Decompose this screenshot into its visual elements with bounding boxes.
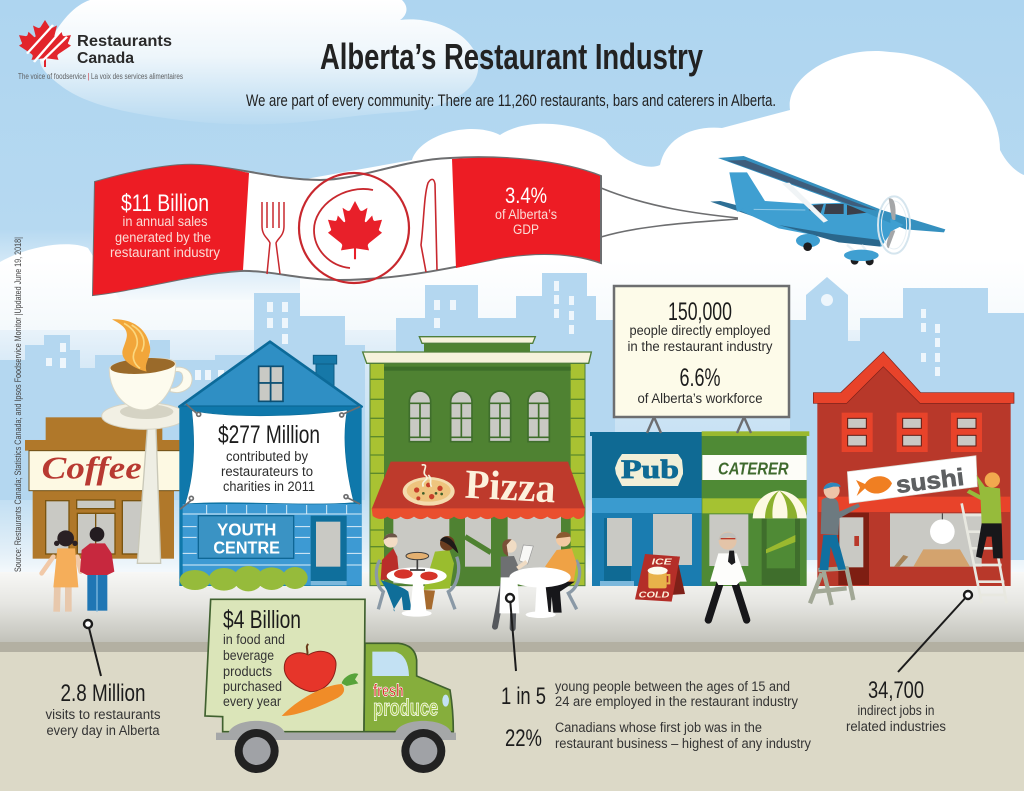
fresh produce lettering	[373, 681, 438, 720]
city skyline	[0, 273, 1024, 560]
icon: plate	[299, 173, 409, 283]
truck box	[205, 599, 365, 732]
charity text: $277 Million	[218, 421, 320, 449]
pub sign: Pub	[621, 455, 679, 484]
banner towed by plane	[93, 157, 601, 295]
stat: first job: 22%	[505, 725, 542, 752]
caterer sign: CATERER	[718, 458, 789, 478]
pizza restaurant	[363, 337, 591, 628]
icon: apple	[284, 644, 336, 692]
logo maple leaf	[19, 20, 71, 67]
brick facade	[183, 504, 362, 585]
logo wordmark: Restaurants	[77, 33, 172, 50]
airplane	[710, 156, 945, 265]
road band and ground	[0, 642, 1024, 791]
cab window	[372, 652, 409, 676]
sushi sign: sushi	[894, 464, 966, 499]
banner text: sales: generated by the	[115, 230, 211, 245]
banner hooks	[180, 404, 360, 509]
stat: visits: 2.8 Million	[60, 680, 146, 707]
banner left red panel	[93, 165, 249, 295]
employment billboard: of Alberta’s workforce	[638, 391, 762, 406]
truck text: products	[223, 664, 272, 679]
banner text: sales: $11 Billion	[121, 190, 209, 217]
stat: indirect jobs: 34,700	[868, 677, 924, 704]
icon: fork	[262, 202, 284, 274]
banner text: sales: in annual sales	[122, 214, 208, 229]
truck text: in food and	[223, 632, 285, 647]
door	[311, 516, 347, 585]
worker on ladder	[962, 472, 1007, 603]
pizza awning	[372, 461, 585, 519]
attic window	[259, 366, 283, 401]
coffee sign	[29, 449, 180, 491]
banner text: GDP: of Alberta’s	[495, 207, 557, 222]
coffee shop	[25, 319, 192, 563]
logo wordmark: Canada	[77, 50, 134, 67]
pub and caterer sign posts	[647, 417, 751, 433]
stat: indirect jobs	[846, 677, 946, 734]
stat: young people: young people between the ages of 15 and	[555, 679, 790, 694]
banner text: GDP	[495, 183, 557, 237]
logo wordmark	[77, 33, 172, 67]
employment billboard: people directly employed	[630, 323, 770, 338]
icon: knife	[421, 179, 437, 272]
caterer umbrella	[753, 491, 807, 518]
stat: young people: 1 in 5	[501, 683, 546, 710]
truck cab	[364, 643, 453, 732]
tow ropes	[601, 188, 738, 237]
charity text: charities in 2011	[223, 479, 315, 494]
caterer sign	[702, 455, 807, 480]
caterer passerby	[708, 532, 747, 620]
stat: young people	[501, 679, 798, 710]
sushi walls and roof	[813, 352, 1014, 586]
icon: fish	[856, 476, 892, 496]
stat: indirect jobs: related industries	[846, 719, 946, 734]
walls and roof	[179, 342, 362, 407]
employment billboard	[614, 286, 789, 417]
right table diner	[509, 532, 580, 618]
charity banner	[185, 410, 354, 504]
truck text: every year	[223, 694, 281, 709]
people walking: girl and man	[42, 527, 114, 612]
icon: carrot	[282, 673, 358, 716]
ice cold sign: ICE	[652, 557, 672, 567]
coffee cup sign on pole	[102, 356, 192, 563]
sushi sign	[847, 456, 977, 503]
sushi window	[890, 513, 982, 567]
ice cold sign	[635, 554, 685, 602]
stat: young people: 24 are employed in the restaurant industry	[555, 694, 798, 709]
youth centre sign: CENTRE	[213, 537, 280, 557]
waitress	[495, 539, 533, 628]
bushes	[180, 566, 308, 591]
charity text	[218, 421, 320, 494]
stat: first job: restaurant business – highest of any industry	[555, 736, 811, 751]
sushi upper windows	[842, 413, 982, 452]
stat: visits	[46, 680, 161, 738]
coffee sign: Coffee	[42, 449, 142, 485]
pub building	[590, 432, 703, 586]
wheels	[235, 729, 445, 773]
banner text: sales	[110, 190, 220, 260]
source note: Source: Restaurants Canada; Statistics Canada; and Ipsos Foodservice Monitor |Updated June 19, 2018|	[13, 237, 24, 572]
coffee shop walls	[25, 417, 180, 559]
pizza lettering: Pizza	[464, 461, 557, 511]
upper windows	[409, 391, 549, 442]
pub sign	[615, 454, 683, 486]
callout pin: indirect jobs	[898, 591, 972, 672]
ice cold sign: COLD	[639, 589, 669, 599]
pizza building	[363, 337, 591, 586]
logo tagline: The voice of foodservice | La voix des services alimentaires	[18, 72, 183, 81]
logo: Restaurants Canada	[18, 20, 183, 81]
callout pin: young people	[506, 594, 516, 671]
truck text: beverage	[223, 648, 274, 663]
sushi door	[838, 513, 869, 585]
chimney	[313, 355, 337, 387]
callout pin: visits	[84, 620, 101, 676]
coffee shop windows	[46, 500, 146, 554]
sushi restaurant	[810, 352, 1014, 605]
stat: first job: Canadians whose first job was in the	[555, 720, 762, 735]
worker on stepladder	[810, 483, 860, 605]
youth centre building	[179, 342, 362, 591]
stat: first job	[505, 720, 811, 752]
fresh produce lettering: fresh	[373, 681, 404, 701]
banner right red panel	[452, 158, 600, 268]
employment billboard: in the restaurant industry	[628, 339, 773, 354]
banner text: GDP: 3.4%	[505, 183, 547, 208]
stat: indirect jobs: indirect jobs in	[858, 703, 934, 718]
truck text: $4 Billion	[223, 606, 301, 634]
youth centre sign: YOUTH	[217, 519, 276, 539]
sidewalk	[0, 572, 1024, 642]
truck text	[223, 606, 301, 709]
icon: canadian maple leaf	[328, 201, 382, 259]
clouds	[0, 0, 1024, 330]
banner text: GDP: GDP	[513, 222, 539, 237]
caterer building	[702, 431, 809, 586]
truck text: purchased	[223, 679, 282, 694]
stat: visits: every day in Alberta	[46, 723, 160, 738]
left table diners	[376, 533, 459, 617]
charity text: restaurateurs to	[221, 464, 313, 479]
pizza icon	[403, 465, 455, 506]
banner shape	[93, 157, 601, 295]
subtitle: We are part of every community: There are 11,260 restaurants, bars and caterers in Alberta.	[246, 92, 776, 110]
ground floor windows and door	[393, 515, 561, 583]
banner text: sales: restaurant industry	[110, 245, 220, 260]
employment billboard: 150,000	[668, 298, 732, 326]
stat: visits: visits to restaurants	[46, 707, 161, 722]
produce truck	[205, 599, 456, 773]
youth centre sign	[198, 516, 294, 558]
title: Alberta’s Restaurant Industry	[320, 36, 703, 77]
fresh produce lettering: produce	[373, 694, 438, 720]
coffee steam	[112, 319, 150, 372]
employment billboard: 6.6%	[680, 364, 720, 392]
charity text: contributed by	[226, 449, 308, 464]
chassis and wheel arches	[216, 721, 456, 740]
